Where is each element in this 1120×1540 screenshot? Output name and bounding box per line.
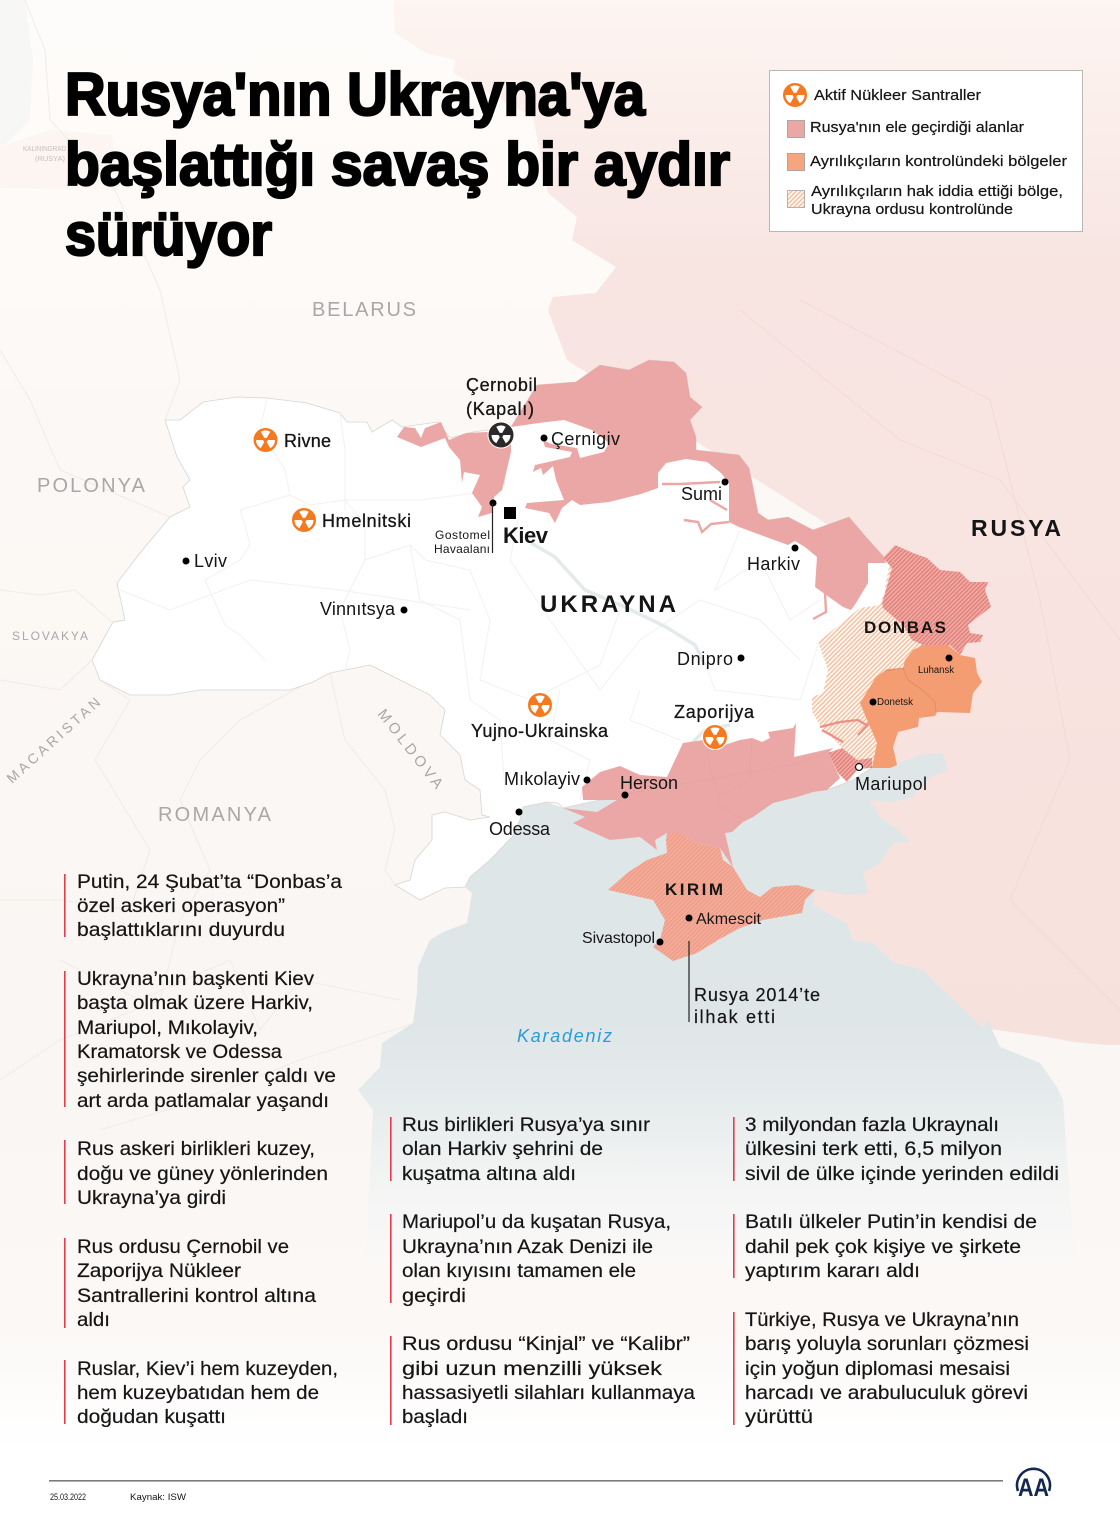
- country labels: Karadeniz: [517, 1026, 612, 1046]
- text block: sirens: başta olmak üzere Harkiv,: [77, 992, 313, 1014]
- title: başlattığı savaş bir aydır: [65, 131, 730, 198]
- kiev marker: Kiev: [503, 523, 549, 548]
- text block: mariupol siege: [390, 1211, 671, 1307]
- neighbouring country borders: [0, 0, 1120, 1130]
- text block: nuclear plants seized: [64, 1236, 316, 1331]
- gostomel airport callout: [434, 500, 496, 556]
- nuclear plant: chernobyl closed: (Kapalı): [466, 399, 534, 419]
- text block: troops entered: Ukrayna’ya girdi: [77, 1187, 226, 1209]
- south region borders: [620, 740, 830, 820]
- text block: turkey diplomacy: Türkiye, Rusya ve Ukrayna’nın: [745, 1309, 1019, 1331]
- nuclear plant: hmelnitski: Hmelnitski: [322, 511, 411, 531]
- text block: troops entered: Rus askeri birlikleri kuzey,: [77, 1138, 315, 1160]
- nuclear plant: rivne: Rivne: [284, 431, 331, 451]
- text block: kiev surrounded: Ruslar, Kiev’i hem kuzeyden,: [77, 1358, 338, 1380]
- gostomel airport callout: Havaalanı: [434, 542, 490, 556]
- text block: nuclear plants seized: aldı: [77, 1309, 110, 1331]
- text block: kharkiv siege: kuşatma altına aldı: [402, 1163, 576, 1185]
- city labels: Luhansk: [918, 665, 955, 676]
- occupied mariupol area: [828, 748, 872, 782]
- text block: mariupol siege: olan kıyısını tamamen ele: [402, 1260, 636, 1282]
- separatist area: [860, 645, 982, 768]
- gostomel airport callout: Gostomel: [435, 528, 490, 542]
- map: ukraine: [92, 360, 991, 961]
- text block: sirens: Ukrayna’nın başkenti Kiev: [77, 968, 314, 990]
- city labels: Odessa: [489, 819, 551, 839]
- text block: kharkiv siege: [390, 1114, 651, 1185]
- crimea annexation callout: Rusya 2014’te: [694, 985, 820, 1005]
- text block: turkey diplomacy: [733, 1309, 1029, 1428]
- city labels: Sivastopol: [582, 930, 655, 947]
- occupied strip in donetsk: [820, 720, 870, 742]
- nuclear plant: chernobyl closed: Çernobil: [466, 375, 537, 395]
- country labels: MACARISTAN: [3, 694, 103, 786]
- country labels: [3, 146, 1061, 1046]
- city labels: Harkiv: [747, 554, 800, 574]
- legend: captured areas: Rusya'nın ele geçirdiği alanlar: [810, 120, 1024, 136]
- text block: refugees: ülkesini terk etti, 6,5 milyon: [745, 1138, 1002, 1160]
- text block: turkey diplomacy: yürüttü: [745, 1406, 813, 1428]
- text block: long-range weapons: [390, 1333, 695, 1428]
- footer date and source: Kaynak: ISW: [130, 1492, 186, 1503]
- nuclear plant: hmelnitski: [292, 508, 411, 532]
- text block: mariupol siege: Ukrayna’nın Azak Denizi ile: [402, 1236, 653, 1258]
- text block: putin announcement: özel askeri operasyon”: [77, 895, 285, 917]
- text block: putin announcement: [64, 871, 342, 941]
- legend panel: [770, 70, 1082, 232]
- dnieper river: [503, 450, 730, 745]
- text block: kharkiv siege: Rus birlikleri Rusya’ya sınır: [402, 1114, 651, 1136]
- text block: sanctions: dahil pek çok kişiye ve şirkete: [745, 1236, 1021, 1258]
- occupied strips: [662, 482, 826, 619]
- title: sürüyor: [65, 201, 272, 268]
- footer date and source: [50, 1492, 186, 1503]
- city labels: Sumi: [681, 484, 722, 504]
- text block: mariupol siege: geçirdi: [402, 1285, 466, 1307]
- text block: long-range weapons: başladı: [402, 1406, 468, 1428]
- nuclear plant: chernobyl closed: [466, 375, 537, 448]
- country labels: (RUSYA): [35, 156, 65, 163]
- country labels: KIRIM: [665, 880, 723, 899]
- country labels: RUSYA: [971, 515, 1061, 541]
- text block: long-range weapons: gibi uzun menzilli yüksek: [402, 1358, 662, 1380]
- text block: sirens: şehirlerinde sirenler çaldı ve: [77, 1065, 336, 1087]
- baltic sea corner: [0, 0, 33, 145]
- crimea annexation callout: [689, 941, 820, 1027]
- country labels: UKRAYNA: [540, 591, 676, 618]
- text block: mariupol siege: Mariupol’u da kuşatan Rusya,: [402, 1211, 671, 1233]
- text block: refugees: [733, 1114, 1059, 1185]
- legend: claimed region: Ukrayna ordusu kontrolünde: [811, 202, 1013, 218]
- occupied area: north-east: [511, 360, 886, 610]
- footer date and source: 25.03.2022: [50, 1492, 86, 1503]
- nuclear plant: yujno-ukrainska: Yujno-Ukrainska: [471, 721, 609, 741]
- country labels: BELARUS: [312, 299, 416, 321]
- nuclear plant: yujno-ukrainska: [471, 692, 609, 741]
- text block: refugees: sivil de ülke içinde yerinden edildi: [745, 1163, 1059, 1185]
- logo: AA: AA: [1018, 1474, 1049, 1502]
- crimea annexation callout: ilhak etti: [694, 1007, 775, 1027]
- text block: troops entered: doğu ve güney yönlerinden: [77, 1163, 328, 1185]
- city labels: [182, 429, 955, 947]
- title: Rusya'nın Ukrayna'ya: [65, 61, 646, 128]
- text block: kharkiv siege: olan Harkiv şehrini de: [402, 1138, 603, 1160]
- text block: turkey diplomacy: barış yoluyla sorunları çözmesi: [745, 1333, 1029, 1355]
- russia territory: [393, 0, 1120, 1045]
- text block: sanctions: yaptırım kararı aldı: [745, 1260, 920, 1282]
- city labels: Çernigiv: [551, 429, 620, 449]
- occupied area: south: [563, 723, 840, 867]
- city labels: Mariupol: [855, 774, 927, 794]
- legend: nuclear plants: [782, 82, 981, 108]
- kiev marker: [503, 507, 549, 548]
- nuclear plant: zaporijya: [674, 702, 755, 750]
- country labels: ROMANYA: [158, 804, 272, 826]
- text block: nuclear plants seized: Rus ordusu Çernobil ve: [77, 1236, 289, 1258]
- country labels: KALININGRAD: [23, 146, 66, 153]
- text block: sanctions: [733, 1211, 1037, 1282]
- city labels: Dnipro: [677, 649, 733, 669]
- crimea: [608, 833, 815, 961]
- text block: putin announcement: Putin, 24 Şubat’ta “Donbas’a: [77, 871, 342, 893]
- kaliningrad region: [0, 130, 118, 190]
- text block: kiev surrounded: doğudan kuşattı: [77, 1406, 226, 1428]
- text block: putin announcement: başlattıklarını duyurdu: [77, 919, 285, 941]
- city labels: Mıkolayiv: [504, 769, 580, 789]
- claimed area: [812, 562, 923, 768]
- title: [65, 61, 730, 268]
- text block: sirens: Kramatorsk ve Odessa: [77, 1041, 282, 1063]
- occupied northern donbas: [882, 545, 991, 655]
- country labels: POLONYA: [37, 475, 146, 497]
- black sea and azov sea: [358, 753, 1075, 1270]
- text block: troops entered: [64, 1138, 328, 1209]
- oblast borders: [120, 398, 820, 800]
- nuclear plant: rivne: [253, 428, 331, 452]
- country labels: MOLDOVA: [374, 706, 446, 792]
- legend: claimed region: Ayrılıkçıların hak iddia ettiği bölge,: [811, 184, 1063, 200]
- city labels: Donetsk: [877, 697, 914, 708]
- city labels: Herson: [620, 773, 678, 793]
- city labels: Akmescit: [696, 911, 762, 928]
- text block: long-range weapons: hassasiyetli silahları kullanmaya: [402, 1382, 695, 1404]
- city labels: Vinnıtsya: [320, 599, 396, 619]
- legend: nuclear plants: Aktif Nükleer Santraller: [814, 88, 981, 104]
- oblast border luhansk donetsk: [885, 668, 936, 712]
- text block: kiev surrounded: hem kuzeybatıdan hem de: [77, 1382, 319, 1404]
- text block: sirens: Mariupol, Mıkolayiv,: [77, 1017, 258, 1039]
- occupied area: north-west: [397, 422, 511, 517]
- text block: turkey diplomacy: harcadı ve arabuluculuk görevi: [745, 1382, 1028, 1404]
- text block: sirens: art arda patlamalar yaşandı: [77, 1090, 329, 1112]
- text block: sirens: [64, 968, 336, 1112]
- city labels: Lviv: [194, 551, 227, 571]
- text block: nuclear plants seized: Santrallerini kontrol altına: [77, 1285, 316, 1307]
- text block: sanctions: Batılı ülkeler Putin’in kendisi de: [745, 1211, 1037, 1233]
- legend: claimed region: [788, 184, 1063, 218]
- country labels: SLOVAKYA: [12, 629, 88, 643]
- nuclear plant: zaporijya: Zaporijya: [674, 702, 755, 722]
- text block: long-range weapons: Rus ordusu “Kinjal” ve “Kalibr”: [402, 1333, 690, 1355]
- text block: refugees: 3 milyondan fazla Ukraynalı: [745, 1114, 999, 1136]
- legend: separatist regions: Ayrılıkçıların kontrolündeki bölgeler: [810, 154, 1067, 170]
- text block: kiev surrounded: [64, 1358, 338, 1428]
- text block: nuclear plants seized: Zaporijya Nükleer: [77, 1260, 242, 1282]
- ukraine territory: [92, 360, 892, 900]
- footer line: [49, 1480, 1003, 1482]
- country labels: DONBAS: [864, 618, 946, 637]
- text block: turkey diplomacy: için yoğun diplomasi mesaisi: [745, 1358, 1010, 1380]
